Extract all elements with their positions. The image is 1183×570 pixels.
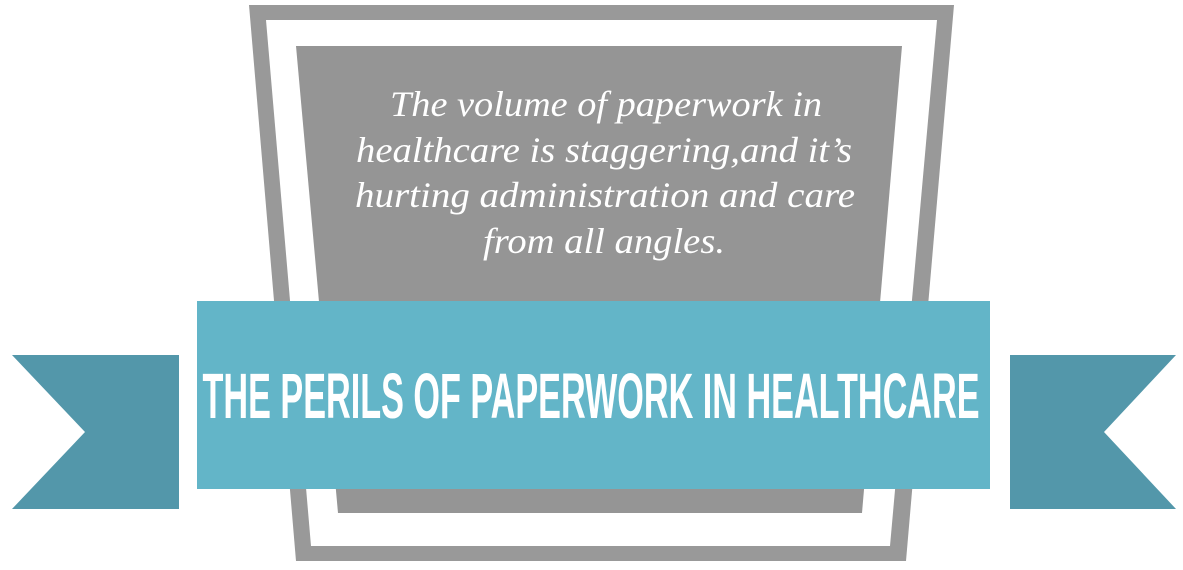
intro text: hurting administration and care [355, 175, 855, 215]
ribbon end: left [12, 355, 179, 509]
intro text: from all angles. [483, 221, 725, 261]
shield: outer gray frame [249, 5, 954, 561]
intro text [355, 84, 855, 261]
title banner [197, 301, 990, 489]
intro text: The volume of paperwork in [390, 84, 822, 124]
intro text: healthcare is staggering,and it’s [356, 130, 852, 170]
shield: inner gray panel [296, 46, 902, 513]
ribbon end: right [1010, 355, 1176, 509]
